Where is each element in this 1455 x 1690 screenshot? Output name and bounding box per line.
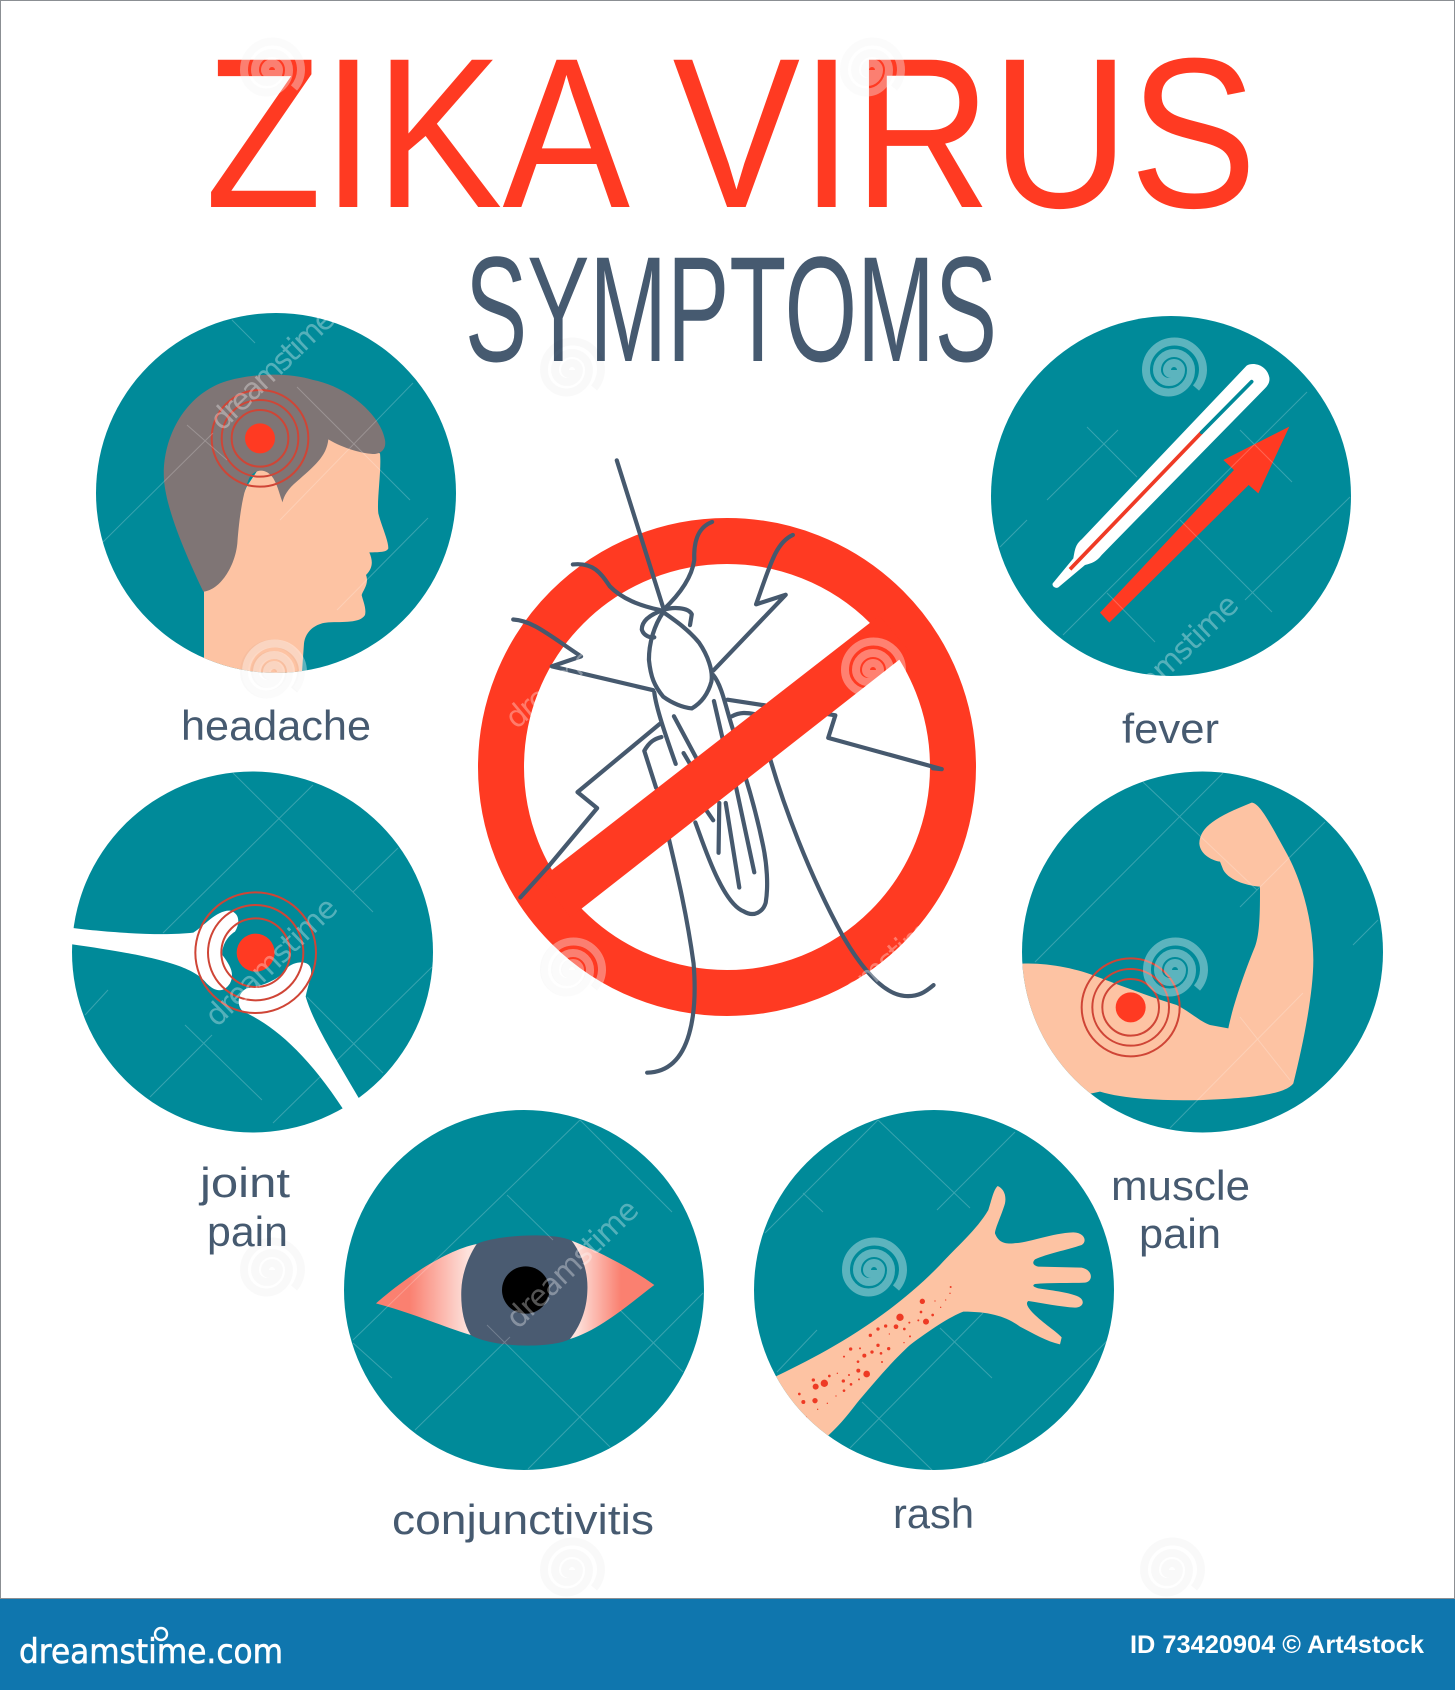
label: muscle pain: [1111, 1162, 1250, 1257]
label: joint pain: joint: [198, 1159, 290, 1206]
label: conjunctivitis: conjunctivitis: [392, 1496, 654, 1543]
watermark text: dreamstime: [499, 603, 648, 736]
label: headache: headache: [181, 702, 371, 749]
label: fever: fever: [1122, 705, 1219, 752]
icon: red eye: [376, 1235, 654, 1346]
prohibition slash: [541, 616, 910, 917]
panel: conjunctivitis: [344, 1110, 704, 1470]
subtitle: SYMPTOMS: [465, 225, 997, 393]
label: joint pain: pain: [207, 1208, 288, 1255]
panel: headache: [96, 313, 456, 677]
icon: arm with rash: [763, 1186, 1091, 1447]
watermark text: dreamstime: [803, 903, 952, 1036]
icon: footer spiral: [155, 1628, 167, 1640]
watermark spirals: [244, 42, 1204, 1592]
label: joint pain: [198, 1159, 290, 1255]
watermark text: [198, 301, 1246, 1336]
label: muscle pain: pain: [1139, 1210, 1221, 1257]
footer banner: [0, 1599, 1455, 1690]
icon: head with pain mark: [164, 375, 388, 677]
icon: rising arrow: [1100, 427, 1289, 623]
watermark text: dreamstime: [499, 1192, 646, 1336]
label: muscle pain: muscle: [1111, 1162, 1250, 1209]
watermark text: dreamstime: [198, 890, 345, 1034]
panel: joint pain: [70, 772, 433, 1132]
watermark text: dreamstime: [203, 301, 343, 438]
icon: thermometer: [1053, 364, 1269, 588]
panel: rash: [754, 1110, 1114, 1470]
panel: muscle pain: [1010, 772, 1383, 1132]
watermark crossing lines: [85, 320, 1378, 1470]
icon: joint bones with pain mark: [70, 892, 370, 1123]
mosquito leg tip over slash: [520, 866, 549, 897]
watermark text: dreamstime: [1099, 587, 1246, 731]
title: ZIKA VIRUS: [205, 14, 1257, 253]
label: rash: rash: [893, 1490, 974, 1537]
center: no-mosquito sign: [501, 460, 953, 1073]
prohibition ring: [501, 541, 953, 993]
footer brand: dreamstime.com: [19, 1632, 283, 1672]
image id and credit: ID 73420904 © Art4stock: [1130, 1631, 1424, 1659]
icon: flexed arm with pain mark: [1010, 803, 1313, 1100]
icon: mosquito outline: [513, 460, 942, 1073]
panel: fever: [991, 316, 1351, 676]
